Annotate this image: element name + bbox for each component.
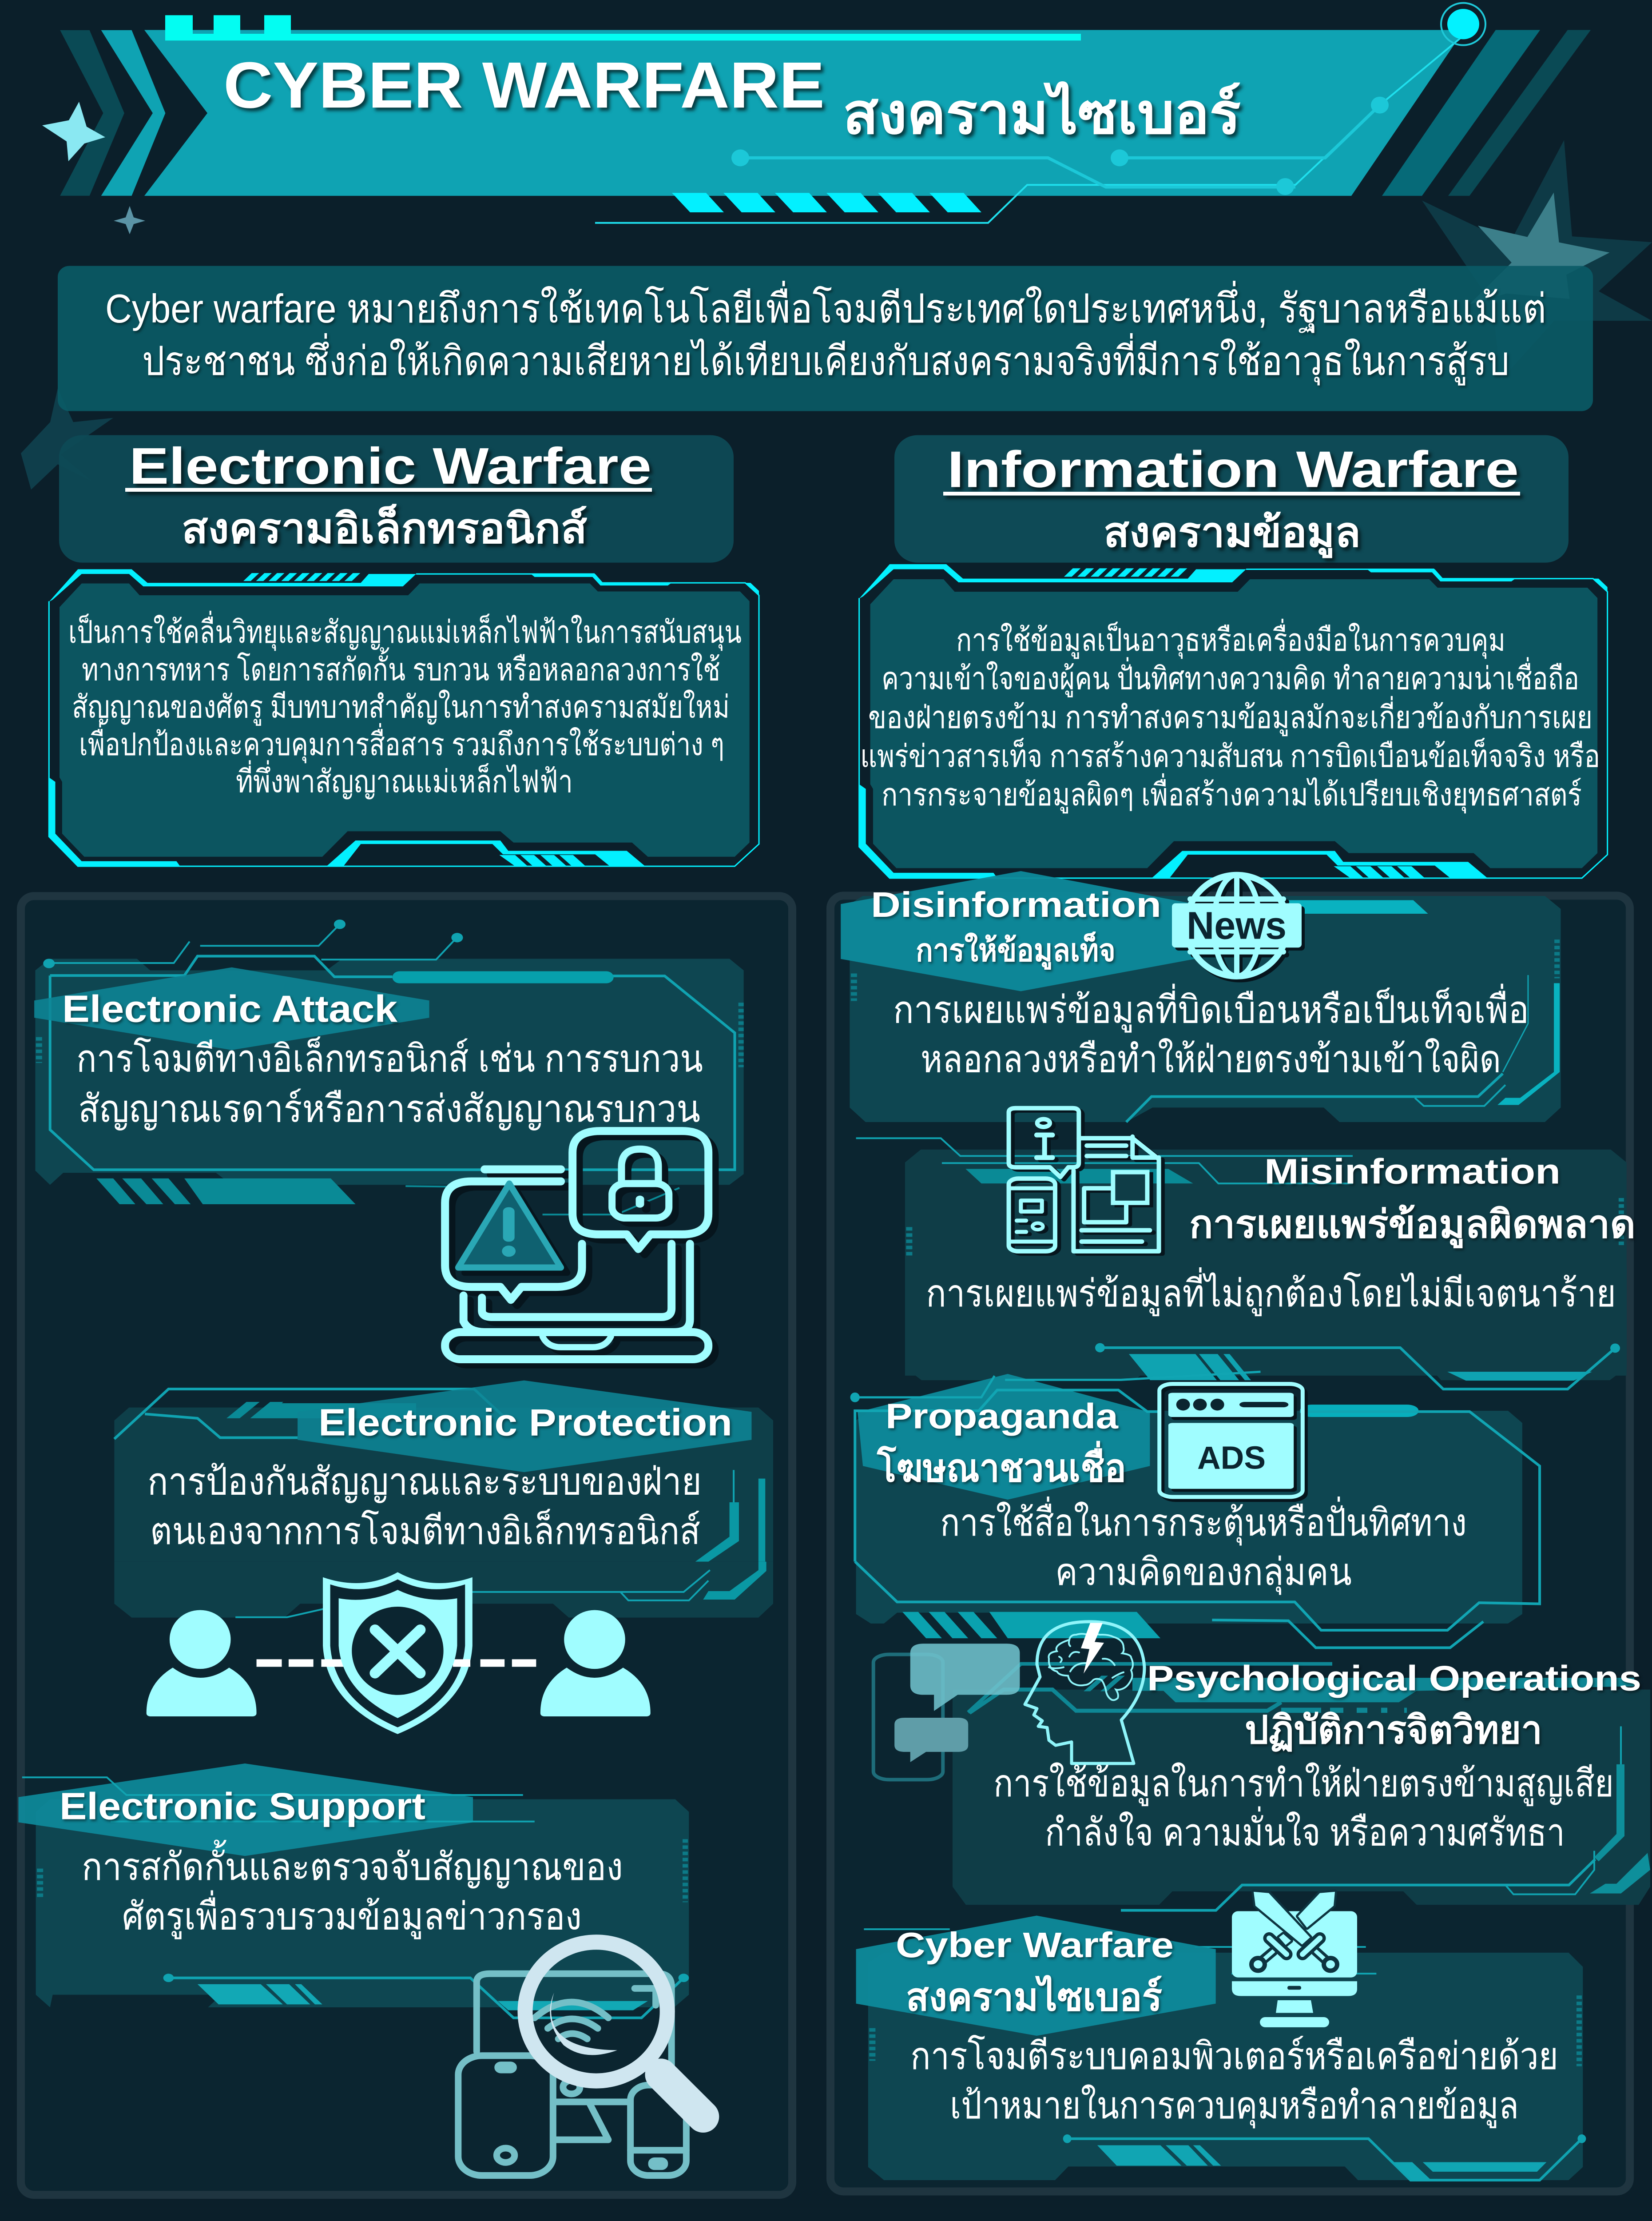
text: electronic protection description: ตนเองจากการโจมตีทางอิเล็กทรอนิกส์ xyxy=(150,1509,700,1552)
title banner xyxy=(60,3,1591,223)
text: disinformation description xyxy=(893,984,1529,1080)
text: electronic attack description: การโจมตีทางอิเล็กทรอนิกส์ เช่น การรบกวน xyxy=(76,1036,703,1080)
text: cyber warfare description: เป้าหมายในการควบคุมหรือทำลายข้อมูล xyxy=(950,2084,1519,2129)
electronic protection card bottom xyxy=(114,1562,773,1618)
heading: Cyber Warfare: Cyber Warfare xyxy=(896,1926,1174,1965)
card: misinformation xyxy=(856,1108,1636,1389)
banner left chevron dark xyxy=(60,30,124,196)
heading thai: psychological operations: ปฏิบัติการจิตวิทยา xyxy=(1245,1708,1542,1752)
text: cyber warfare description xyxy=(910,2035,1558,2129)
heading: Propaganda: Propaganda xyxy=(886,1397,1119,1436)
person left xyxy=(147,1610,257,1716)
text: electronic warfare description: เป็นการใช้คลื่นวิทยุและสัญญาณแม่เหล็กไฟฟ้าในการสนับสนุน xyxy=(68,611,742,651)
heading: Misinformation: Misinformation xyxy=(1264,1152,1561,1191)
card: psychological operations xyxy=(874,1622,1650,1911)
heading thai: misinformation: การเผยแพร่ข้อมูลผิดพลาด xyxy=(1189,1203,1636,1248)
panel: information warfare frame xyxy=(859,564,1608,878)
banner right outer band xyxy=(1448,30,1591,196)
heading: Electronic Warfare: Electronic Warfare xyxy=(129,438,651,495)
top node xyxy=(1441,3,1485,45)
misinformation card lower xyxy=(905,1266,1627,1380)
card: cyber warfare xyxy=(856,1892,1586,2180)
card: disinformation xyxy=(841,871,1561,1122)
card: electronic support xyxy=(19,1763,703,2176)
hazard stripes under banner xyxy=(672,193,981,212)
text: propaganda description xyxy=(940,1497,1467,1595)
psychological operations card shape xyxy=(953,1690,1650,1905)
text: electronic warfare description: เพื่อปกป้องและควบคุมการสื่อสาร รวมถึงการใช้ระบบต่าง ๆ xyxy=(79,723,724,763)
text: electronic warfare description xyxy=(68,611,742,799)
heading thai: สงครามข้อมูล xyxy=(1104,509,1361,558)
circuit nodes xyxy=(731,97,1389,195)
banner right band xyxy=(1382,30,1540,196)
shield xyxy=(257,1572,536,1734)
cyber warfare card shape xyxy=(856,1916,1586,2180)
text: electronic protection description: การป้องกันสัญญาณและระบบของฝ่าย xyxy=(147,1461,702,1504)
icon: devices under magnifier xyxy=(458,1942,703,2176)
heading: Psychological Operations: Psychological Operations xyxy=(1147,1659,1641,1698)
background star: top right light xyxy=(1469,192,1609,304)
misinformation card shape xyxy=(856,1138,1627,1376)
text: propaganda description: การใช้สื่อในการกระตุ้นหรือปั่นทิศทาง xyxy=(940,1497,1467,1545)
text: disinformation description: หลอกลวงหรือทำให้ฝ่ายตรงข้ามเข้าใจผิด xyxy=(921,1038,1501,1080)
text: information warfare description: การใช้ข้อมูลเป็นอาวุธหรือเครื่องมือในการควบคุม xyxy=(956,619,1505,659)
electronic protection card top xyxy=(114,1381,773,1562)
circuit lines on banner xyxy=(740,105,1380,187)
panel: electronic warfare column xyxy=(21,896,792,2195)
panel: information warfare column xyxy=(830,896,1630,2191)
heading: Information Warfare: Information Warfare xyxy=(947,441,1519,498)
text: electronic warfare description: ทางการทหาร โดยการสกัดกั้น รบกวน หรือหลอกลวงการใช้ xyxy=(82,647,720,687)
icon: head with brain and lightning xyxy=(1025,1622,1144,1763)
panel: electronic warfare header xyxy=(59,435,734,563)
background star: top right dark xyxy=(1422,140,1652,380)
text: electronic warfare description: สัญญาณของศัตรู มีบทบาทสำคัญในการทำสงครามสมัยใหม่ xyxy=(72,689,730,726)
text: electronic attack description xyxy=(76,1036,703,1131)
misinformation circuit xyxy=(1095,1343,1620,1389)
background star: left xyxy=(21,388,113,490)
electronic attack card shape xyxy=(34,919,744,1214)
heading thai: disinformation: การให้ข้อมูลเท็จ xyxy=(916,931,1116,970)
panel: intro definition xyxy=(58,266,1593,411)
banner main body xyxy=(144,30,1464,196)
heading: Electronic Protection: Electronic Protection xyxy=(318,1401,732,1444)
person right xyxy=(540,1610,651,1716)
electronic support card shape xyxy=(19,1763,689,2018)
heading thai: สงครามอิเล็กทรอนิกส์ xyxy=(182,503,588,552)
text: disinformation description: การเผยแพร่ข้อมูลที่บิดเบือนหรือเป็นเท็จเพื่อ xyxy=(893,984,1529,1033)
card: propaganda xyxy=(850,1372,1540,1648)
top bright bar with castellations xyxy=(165,15,1081,40)
text: propaganda description: ความคิดของกลุ่มคน xyxy=(1055,1551,1352,1595)
icon: monitor with crossed swords xyxy=(1232,1892,1357,2027)
text: electronic protection description xyxy=(147,1461,702,1552)
icon: laptop with warning and lock xyxy=(445,1131,708,1359)
heading: Electronic Attack: Electronic Attack xyxy=(62,987,397,1030)
heading: Electronic Support: Electronic Support xyxy=(60,1785,425,1827)
title thai: สงครามไซเบอร์ xyxy=(843,81,1241,146)
banner left chevron teal xyxy=(101,30,165,196)
text: electronic support description: ศัตรูเพื่อรวบรวมข้อมูลข่าวกรอง xyxy=(122,1891,582,1939)
propaganda card shape xyxy=(850,1372,1540,1648)
circuit line under banner to top node xyxy=(595,35,1464,223)
icon: ads window: ADS xyxy=(1197,1440,1266,1476)
heading thai: propaganda: โฆษณาชวนเชื่อ xyxy=(877,1441,1126,1490)
text: electronic support description xyxy=(82,1840,623,1939)
text: electronic support description: การสกัดกั้นและตรวจจับสัญญาณของ xyxy=(82,1840,623,1889)
text: psychological operations description xyxy=(993,1762,1614,1854)
heading: Disinformation: Disinformation xyxy=(871,885,1161,924)
icon: two people blocked by shield xyxy=(147,1572,651,1734)
psychological operations decoration xyxy=(968,1664,1650,1911)
card: electronic protection xyxy=(114,1381,773,1734)
title english: CYBER WARFARE xyxy=(223,49,825,122)
icon: ads window xyxy=(1160,1384,1303,1497)
panel: information warfare header xyxy=(894,435,1569,563)
heading thai: cyber warfare: สงครามไซเบอร์ xyxy=(906,1975,1162,2019)
icon: news globe: News xyxy=(1187,904,1287,947)
text: electronic warfare description: ที่พึ่งพาสัญญาณแม่เหล็กไฟฟ้า xyxy=(236,760,573,799)
icon: info document and phone xyxy=(1009,1108,1159,1251)
icon: news globe xyxy=(1172,875,1302,976)
sparkle star large xyxy=(42,102,105,161)
panel: electronic warfare frame xyxy=(49,569,759,866)
icon: chat bubbles on phone xyxy=(874,1644,1020,1779)
text: information warfare description xyxy=(860,619,1600,814)
sparkle star small xyxy=(114,206,145,234)
card: electronic attack xyxy=(34,919,744,1359)
text: electronic attack description: สัญญาณเรดาร์หรือการส่งสัญญาณรบกวน xyxy=(78,1088,700,1131)
disinformation card shape xyxy=(841,871,1561,1122)
